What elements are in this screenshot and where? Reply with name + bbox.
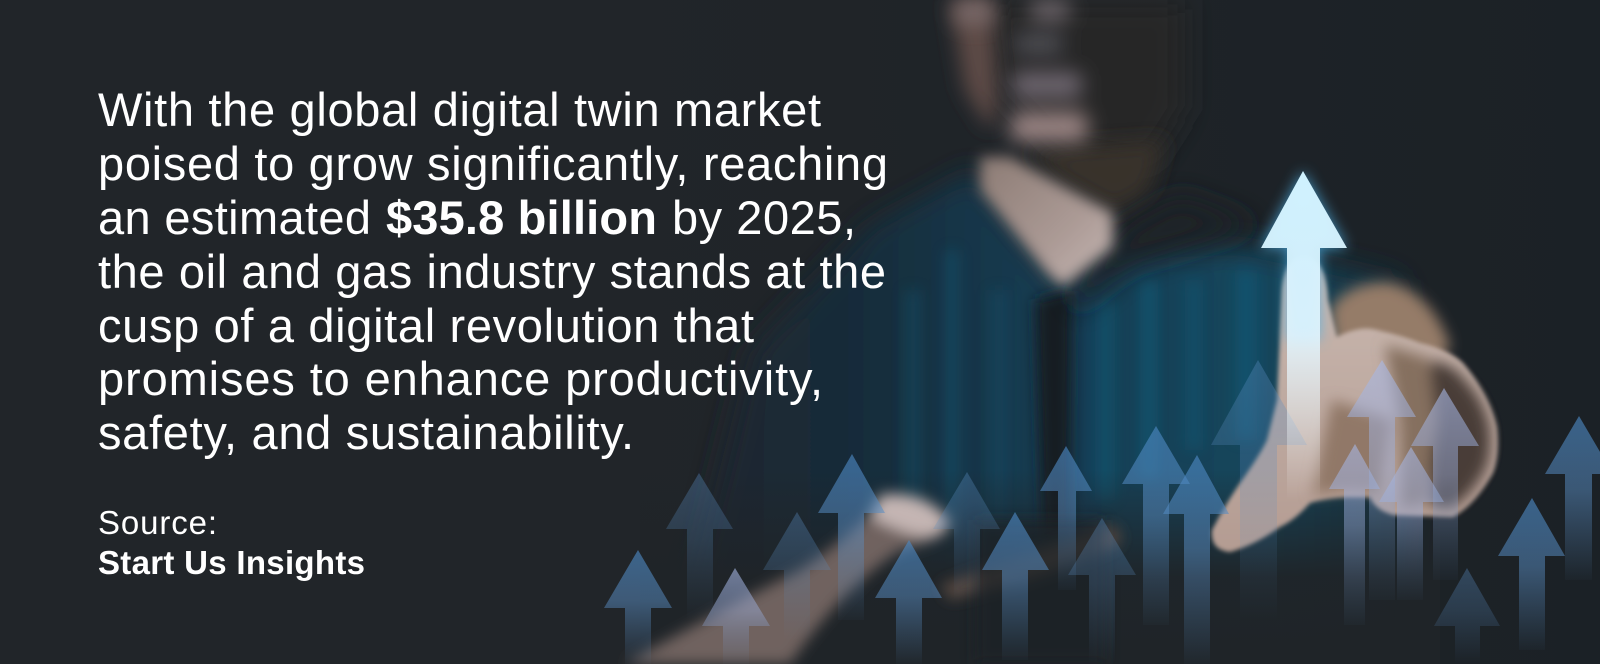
arrow [1122, 426, 1190, 625]
shirt [670, 170, 1420, 664]
arrow [1498, 498, 1565, 650]
arrow [1379, 447, 1444, 600]
arrow [818, 454, 885, 620]
main text block: the oil and gas industry stands at the [98, 245, 886, 298]
arrow [1040, 446, 1092, 590]
cheek [950, 0, 998, 130]
main glowing arrow [1261, 171, 1347, 500]
arrow [1347, 360, 1416, 600]
main text block: poised to grow significantly, reaching [98, 137, 888, 190]
arrow [982, 512, 1049, 660]
arrow [604, 550, 672, 664]
source label: Source: [98, 504, 217, 541]
arrow [875, 540, 942, 664]
beard [1027, 140, 1165, 212]
arrow [933, 472, 1000, 600]
arrow [1411, 388, 1479, 580]
shirt stripes [905, 250, 1257, 540]
arrow [1434, 568, 1500, 664]
arrow [1211, 360, 1307, 620]
main text block: With the global digital twin market [98, 83, 821, 136]
facial highlights [955, 0, 1088, 142]
pointing hand [1212, 257, 1498, 552]
arrow [702, 568, 770, 664]
arrow [1545, 416, 1600, 580]
arrow [1163, 455, 1229, 664]
neck [980, 157, 1113, 287]
collar shadow [1070, 195, 1260, 310]
arrow [1068, 518, 1136, 664]
main text block: promises to enhance productivity, [98, 352, 823, 405]
arrow [763, 512, 831, 640]
source label: Start Us Insights [98, 544, 365, 581]
main text block: safety, and sustainability. [98, 406, 634, 459]
source label [98, 504, 365, 581]
main text block: by 2025, [672, 191, 856, 244]
main text block: cusp of a digital revolution that [98, 299, 754, 352]
main text block [98, 83, 888, 459]
placket [1035, 290, 1072, 540]
phone [975, 520, 1105, 664]
right forearm [1330, 282, 1450, 400]
photo: blurred person [625, 0, 1498, 664]
arrow [666, 473, 733, 620]
arrow [1329, 444, 1380, 625]
left hand [625, 494, 1120, 664]
main text block: $35.8 billion [386, 191, 657, 244]
arrows: rising background arrows [604, 360, 1600, 664]
face shadow [990, 0, 1185, 165]
shirt lower fade [640, 470, 1440, 664]
main text block: an estimated [98, 191, 371, 244]
hand shading [1312, 345, 1490, 508]
